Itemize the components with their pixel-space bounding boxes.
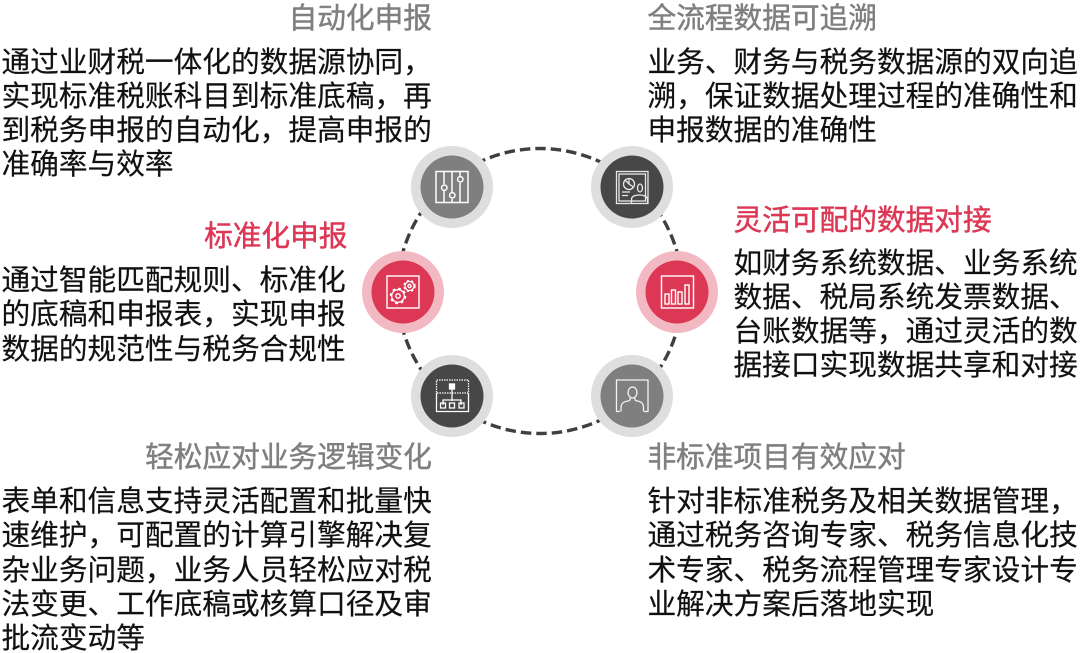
heading: 标准化申报 <box>204 221 348 253</box>
text block: 表单和信息支持灵活配置和批量快 <box>2 486 432 518</box>
text block: 到税务申报的自动化，提高申报的 <box>2 115 432 147</box>
text block: 通过税务咨询专家、税务信息化技 <box>648 520 1078 552</box>
text block: 如财务系统数据、业务系统 <box>734 248 1078 280</box>
icon: sliders <box>411 146 493 228</box>
icon: org chart <box>411 355 493 437</box>
text block: 针对非标准税务及相关数据管理， <box>648 486 1078 518</box>
text block <box>734 248 1078 382</box>
text block <box>2 46 432 181</box>
icon: gears <box>362 251 444 333</box>
text block <box>2 265 346 366</box>
heading: 轻松应对业务逻辑变化 <box>145 442 432 474</box>
text block: 溯，保证数据处理过程的准确性和 <box>648 81 1078 113</box>
icon: bar chart <box>636 251 718 333</box>
dashed ring <box>398 148 682 434</box>
text block: 法变更、工作底稿或核算口径及审 <box>2 589 432 621</box>
panel: right 灵活可配的数据对接 <box>734 204 1078 382</box>
panel: bottom-right 非标准项目有效应对 <box>648 442 1078 621</box>
text block: 数据的规范性与税务合规性 <box>2 334 346 366</box>
text block: 业务、财务与税务数据源的双向追 <box>648 46 1078 78</box>
text block: 台账数据等，通过灵活的数 <box>734 316 1078 348</box>
text block: 业解决方案后落地实现 <box>648 589 934 621</box>
panel: top-left 自动化申报 <box>2 2 432 181</box>
heading: 自动化申报 <box>289 2 432 34</box>
text block <box>2 486 432 653</box>
heading: 全流程数据可追溯 <box>648 2 877 34</box>
text block: 申报数据的准确性 <box>648 115 877 147</box>
text block <box>648 46 1078 147</box>
heading: 非标准项目有效应对 <box>648 442 906 474</box>
text block: 速维护，可配置的计算引擎解决复 <box>2 520 432 552</box>
heading: 灵活可配的数据对接 <box>734 204 992 236</box>
text block: 数据、税局系统发票数据、 <box>734 282 1078 314</box>
text block: 实现标准税账科目到标准底稿，再 <box>2 81 432 113</box>
panel: top-right 全流程数据可追溯 <box>648 2 1078 147</box>
text block: 准确率与效率 <box>2 149 174 181</box>
icon: presentation board <box>591 146 673 228</box>
text block: 据接口实现数据共享和对接 <box>734 350 1078 382</box>
text block: 术专家、税务流程管理专家设计专 <box>648 555 1078 587</box>
text block <box>648 486 1078 621</box>
panel: left 标准化申报 <box>2 221 348 366</box>
text block: 通过智能匹配规则、标准化 <box>2 265 346 297</box>
icon: person portrait <box>591 355 673 437</box>
text block: 通过业财税一体化的数据源协同， <box>2 46 432 78</box>
text block: 杂业务问题，业务人员轻松应对税 <box>2 555 432 587</box>
text block: 的底稿和申报表，实现申报 <box>2 299 346 331</box>
panel: bottom-left 轻松应对业务逻辑变化 <box>2 442 432 653</box>
